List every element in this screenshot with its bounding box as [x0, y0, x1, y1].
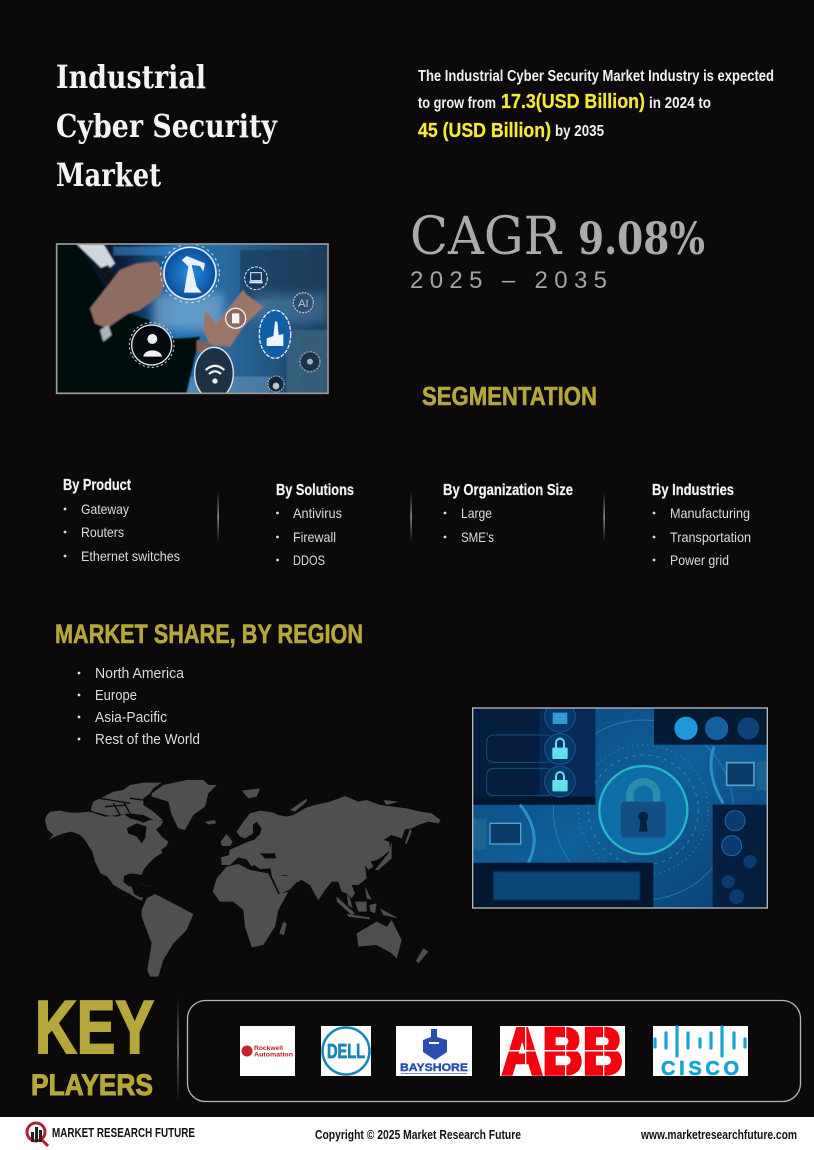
logo: Rockwell Automation: Rockwell — [254, 1046, 283, 1052]
segment: by organization size: Large — [461, 505, 492, 521]
segment: by solutions: By Solutions — [276, 482, 354, 499]
CAGR figure: 9.08% — [578, 214, 705, 265]
key players panel — [188, 1000, 800, 1102]
segment: by product — [63, 477, 180, 564]
logo: Bayshore: BAYSHORE — [400, 1062, 468, 1074]
title: Industrial — [56, 58, 206, 96]
heading: market share by region: MARKET SHARE, BY REGION — [55, 619, 363, 649]
panel: locks list — [473, 701, 595, 805]
CAGR figure: 2025 – 2035 — [410, 267, 607, 294]
icon: robot arm circle — [161, 244, 219, 303]
icon: wifi circle — [195, 347, 233, 399]
logo: Dell — [321, 1026, 371, 1076]
segment: by product: Gateway — [81, 501, 129, 517]
world map — [45, 780, 441, 977]
icon: worker circle — [129, 323, 174, 367]
icon: AI circle: AI — [298, 298, 309, 310]
logo: Dell: DELL — [327, 1041, 365, 1063]
icon: cloud circle — [268, 376, 284, 392]
segment: by organization size: SME’s — [461, 529, 494, 545]
market growth summary text: to grow from — [418, 95, 496, 112]
market growth summary text: in 2024 to — [649, 95, 711, 112]
title: Cyber Security — [56, 107, 278, 145]
region list — [78, 665, 200, 748]
photo: hands touching industrial icons — [57, 244, 328, 399]
segment: by product: Ethernet switches — [81, 548, 180, 564]
segment: by industries: By Industries — [652, 482, 734, 499]
region list: Rest of the World — [95, 731, 200, 748]
icon: laptop circle — [245, 267, 267, 290]
footer bar: Copyright © 2025 Market Research Future — [315, 1128, 521, 1142]
logo: Bayshore — [396, 1026, 472, 1076]
icon: monitor left — [473, 805, 534, 863]
segment: by solutions — [276, 482, 354, 568]
market growth summary text — [418, 68, 774, 142]
segment: by industries: Manufacturing — [670, 505, 750, 521]
market growth summary text: by 2035 — [555, 123, 604, 140]
logo: Cisco: CISCO — [661, 1058, 739, 1080]
icon: factory circle — [259, 310, 291, 358]
segment: by industries: Transportation — [670, 529, 751, 545]
icon: gear circle — [300, 352, 320, 372]
CAGR figure — [410, 207, 705, 294]
footer bar: MARKET RESEARCH FUTURE — [52, 1126, 195, 1140]
segment: by industries — [652, 482, 751, 568]
icon: central padlock — [599, 766, 687, 854]
segment: by solutions: Firewall — [293, 529, 336, 545]
segment: by product: By Product — [63, 477, 131, 494]
logo: Rockwell Automation: Automation — [254, 1052, 293, 1058]
key players heading: KEY — [35, 985, 154, 1069]
market growth summary text: 45 (USD Billion) — [418, 120, 551, 142]
region list: Asia-Pacific — [95, 709, 167, 726]
segment: by industries: Power grid — [670, 552, 729, 568]
icon: market research future logo — [27, 1123, 48, 1146]
photo: digital padlock security — [473, 701, 767, 908]
panel: percent gauges — [654, 708, 767, 745]
title — [56, 58, 278, 194]
segment: by organization size — [443, 482, 573, 545]
icon: AI circle — [293, 293, 313, 313]
segment: by organization size: By Organization Size — [443, 482, 573, 499]
segment: by product: Routers — [81, 524, 124, 540]
segment: by solutions: DDOS — [293, 552, 325, 568]
panel: data table — [473, 863, 653, 908]
icon: monitor right — [711, 747, 767, 803]
region list: Europe — [95, 687, 137, 704]
footer bar — [0, 1117, 814, 1150]
key players heading — [31, 985, 154, 1102]
segment: by solutions: Antivirus — [293, 505, 342, 521]
title: Market — [56, 156, 161, 194]
logo: Cisco — [653, 1026, 748, 1080]
logo: ABB: ABB — [502, 1014, 623, 1088]
CAGR figure: CAGR — [410, 207, 563, 267]
key players heading: PLAYERS — [31, 1069, 153, 1102]
panel: app icons — [713, 805, 767, 908]
icon: document circle — [226, 308, 246, 328]
market growth summary text: 17.3(USD Billion) — [501, 91, 645, 113]
logo: Rockwell Automation — [240, 1026, 295, 1076]
region list: North America — [95, 665, 185, 682]
heading: segmentation: SEGMENTATION — [422, 381, 597, 411]
